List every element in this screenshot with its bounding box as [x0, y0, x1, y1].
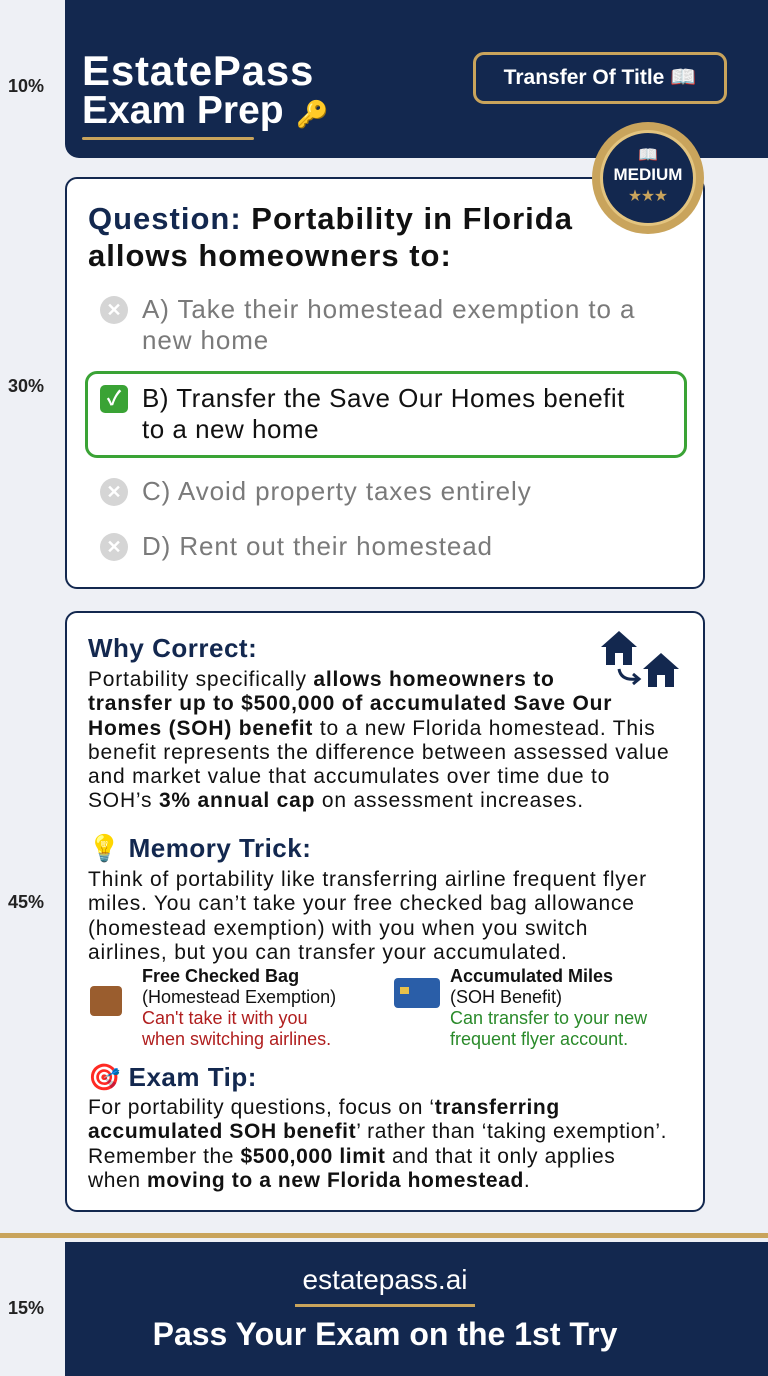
explanation card [65, 611, 705, 1212]
comparison: checked bag [90, 966, 336, 1049]
footer underline [295, 1304, 475, 1307]
question text: allows homeowners to: [88, 238, 452, 273]
gold divider [0, 1233, 768, 1238]
comparison: checked bag: Can't take it with you [142, 1008, 308, 1028]
option C: ✕ [106, 482, 122, 502]
footer url: estatepass.ai [302, 1264, 468, 1295]
comparison: miles: Can transfer to your new [450, 1008, 647, 1028]
memory trick heading: 💡 Memory Trick: [88, 833, 311, 863]
why correct text [88, 668, 669, 812]
why correct text: and market value that accumulates over time due to [88, 765, 610, 788]
comparison: checked bag: Free Checked Bag [142, 966, 299, 986]
percentage label 30%: 30% [8, 376, 44, 396]
comparison: checked bag: (Homestead Exemption) [142, 987, 336, 1007]
comparison: miles: (SOH Benefit) [450, 987, 562, 1007]
question card [65, 177, 705, 589]
comparison: miles [394, 966, 648, 1049]
memory trick text: Think of portability like transferring airline frequent flyer [88, 868, 647, 891]
header [65, 0, 768, 158]
exam tip text: when moving to a new Florida homestead. [88, 1169, 530, 1192]
why correct text: SOH’s 3% annual cap on assessment increases. [88, 789, 584, 812]
why correct heading: Why Correct: [88, 633, 257, 663]
title: Exam Prep 🔑 [82, 89, 329, 132]
category badge: Transfer Of Title 📖 [504, 66, 696, 89]
exam tip text: Remember the $500,000 limit and that it only applies [88, 1145, 615, 1168]
exam tip heading: 🎯 Exam Tip: [88, 1062, 257, 1092]
comparison: miles: frequent flyer account. [450, 1029, 628, 1049]
difficulty medal: ★★★ [628, 188, 668, 203]
option A: ✕ [106, 300, 122, 320]
category badge [473, 52, 727, 104]
exam tip text [88, 1096, 667, 1192]
why correct text: Homes (SOH) benefit to a new Florida homestead. This [88, 717, 656, 740]
percentage label 10%: 10% [8, 76, 44, 96]
comparison: miles: Accumulated Miles [450, 966, 613, 986]
comparison: checked bag: when switching airlines. [142, 1029, 331, 1049]
option A: new home [142, 325, 269, 355]
option C: C) Avoid property taxes entirely [142, 476, 532, 506]
memory trick text: airlines, but you can transfer your accumulated. [88, 941, 568, 964]
why correct text: benefit represents the difference between assessed value [88, 741, 669, 764]
exam tip text: accumulated SOH benefit’ rather than ‘taking exemption’. [88, 1120, 667, 1143]
icon: card [394, 978, 440, 1008]
question text [88, 201, 573, 273]
question text: Question: Portability in Florida [88, 201, 573, 236]
difficulty medal [592, 122, 704, 234]
title underline [82, 137, 254, 140]
memory trick text: miles. You can’t take your free checked bag allowance [88, 892, 635, 915]
why correct text: transfer up to $500,000 of accumulated Save Our [88, 692, 612, 715]
memory trick text [88, 868, 647, 964]
percentage label 45%: 45% [8, 892, 44, 912]
title [82, 47, 329, 132]
option B correct: ✓ [107, 388, 121, 410]
exam tip text: For portability questions, focus on ‘transferring [88, 1096, 560, 1119]
icon: houses [601, 631, 679, 687]
option D: ✕ [106, 537, 122, 557]
option B correct: to a new home [142, 414, 319, 444]
option A: A) Take their homestead exemption to a [142, 294, 635, 324]
footer [65, 1242, 768, 1376]
option A [100, 294, 635, 355]
why correct text: Portability specifically allows homeowners to [88, 668, 555, 691]
difficulty medal: 📖 [638, 147, 658, 164]
percentage label 15%: 15% [8, 1298, 44, 1318]
title: EstatePass [82, 47, 314, 94]
icon: suitcase [90, 986, 122, 1016]
option D: D) Rent out their homestead [142, 531, 493, 561]
option B correct: B) Transfer the Save Our Homes benefit [142, 383, 625, 413]
footer tagline: Pass Your Exam on the 1st Try [153, 1316, 617, 1352]
option B correct [85, 371, 687, 458]
memory trick text: (homestead exemption) with you when you switch [88, 917, 588, 940]
difficulty medal: MEDIUM [614, 165, 682, 184]
